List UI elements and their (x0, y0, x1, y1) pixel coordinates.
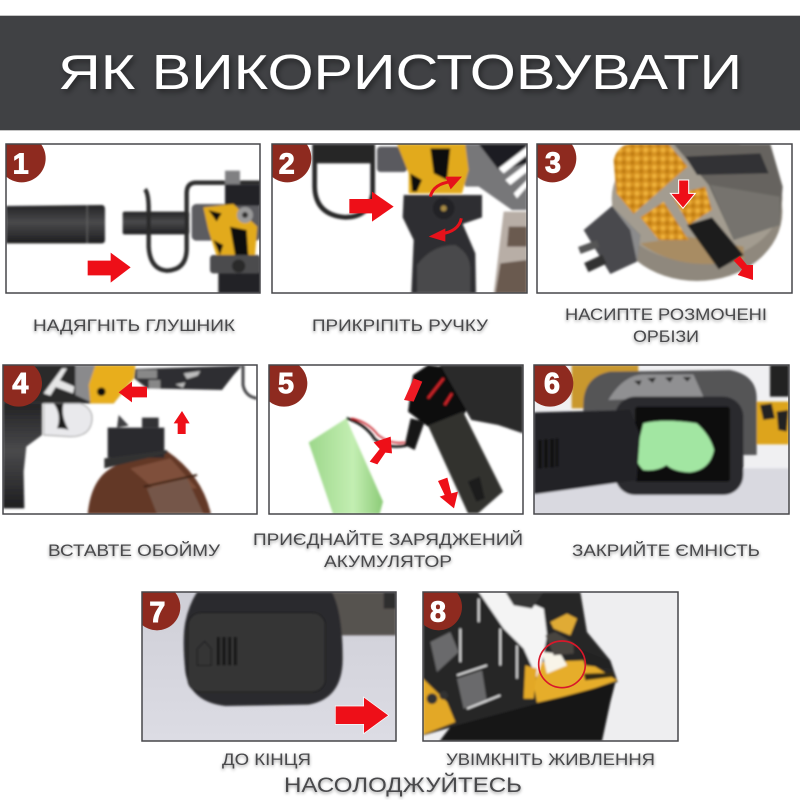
red arrows (119, 382, 190, 434)
caption 6: ЗАКРИЙТЕ ЄМНІСТЬ (572, 541, 760, 560)
number badge: 1 (13, 149, 29, 181)
wire stock (315, 144, 374, 217)
caption 4: ВСТАВТЕ ОБОЙМУ (48, 541, 221, 560)
grip (440, 683, 615, 741)
silencer (6, 205, 105, 243)
panel: step 4 insert magazine (0, 360, 257, 514)
compartment frame (615, 397, 743, 495)
number badge: 3 (545, 147, 561, 179)
dark lid (674, 144, 783, 240)
battery (309, 418, 383, 514)
red arrows (670, 180, 753, 280)
caption 5 (253, 530, 523, 571)
caption 3: ОРБІЗИ (633, 328, 699, 346)
table surface (534, 468, 789, 514)
panel: step 7 close to the end (134, 584, 396, 741)
panel: step 6 close compartment (527, 360, 789, 514)
barrel and wire stock (123, 183, 261, 271)
magazine (88, 415, 211, 514)
panel: step 1 attach silencer (0, 134, 261, 293)
caption 3: НАСИПТЕ РОЗМОЧЕНІ (565, 306, 767, 324)
number badge (527, 360, 573, 407)
orange beads (614, 144, 712, 240)
closing line: НАСОЛОДЖУЙТЕСЬ (284, 773, 522, 797)
number badge (0, 134, 46, 182)
number badge (415, 584, 462, 630)
caption 8: УВІМКНІТЬ ЖИВЛЕННЯ (446, 751, 655, 769)
grip (210, 255, 261, 293)
grip (403, 195, 482, 293)
number badge (528, 134, 576, 182)
gun rear (583, 370, 757, 455)
number badge: 2 (279, 148, 295, 180)
panel: step 3 fill orbeez (528, 134, 792, 293)
trigger guard (44, 403, 92, 437)
number badge (0, 360, 42, 407)
panel: step 2 attach grip (263, 134, 527, 293)
camo background (572, 365, 789, 444)
gun body camo (192, 171, 261, 256)
number badge: 5 (278, 368, 294, 400)
vents and latch (197, 637, 237, 665)
gun end cap (184, 592, 343, 706)
number badge: 4 (12, 368, 28, 400)
drum (612, 135, 782, 281)
open cover (534, 410, 640, 494)
red arrows (370, 378, 458, 508)
camo gun body (3, 365, 242, 403)
connector (578, 206, 640, 274)
caption 5: ПРИЄДНАЙТЕ ЗАРЯДЖЕНИЙ (253, 530, 523, 549)
caption 7: ДО КІНЦЯ (222, 751, 311, 769)
red arrow (88, 253, 131, 283)
number badge: 7 (149, 597, 165, 629)
number badge (261, 360, 307, 407)
caption 3 (565, 306, 767, 346)
wires and connector (346, 418, 425, 450)
caption 5: АКУМУЛЯТОР (324, 553, 452, 571)
magazine edge (494, 212, 527, 293)
red arrows (349, 177, 462, 242)
caption 1: НАДЯГНІТЬ ГЛУШНИК (33, 317, 235, 335)
number badge: 6 (544, 368, 560, 400)
title: ЯК ВИКОРИСТОВУВАТИ (58, 45, 742, 100)
red circle (539, 641, 585, 688)
number badge (263, 134, 311, 182)
gun body camo (377, 144, 527, 210)
number badge (134, 584, 180, 630)
battery cover (428, 412, 503, 513)
red arrow (335, 697, 389, 734)
wire stock (243, 365, 257, 398)
pistol grip (3, 403, 42, 508)
panel: step 8 switch on (415, 584, 678, 741)
number badge: 8 (430, 596, 446, 628)
header band (0, 15, 800, 131)
gun rear (408, 365, 523, 433)
background gun (329, 592, 396, 635)
battery (636, 421, 714, 472)
caption 2: ПРИКРІПІТЬ РУЧКУ (312, 317, 489, 335)
panel: step 5 connect battery (261, 360, 523, 514)
slider (687, 217, 744, 269)
camo body (423, 592, 618, 735)
